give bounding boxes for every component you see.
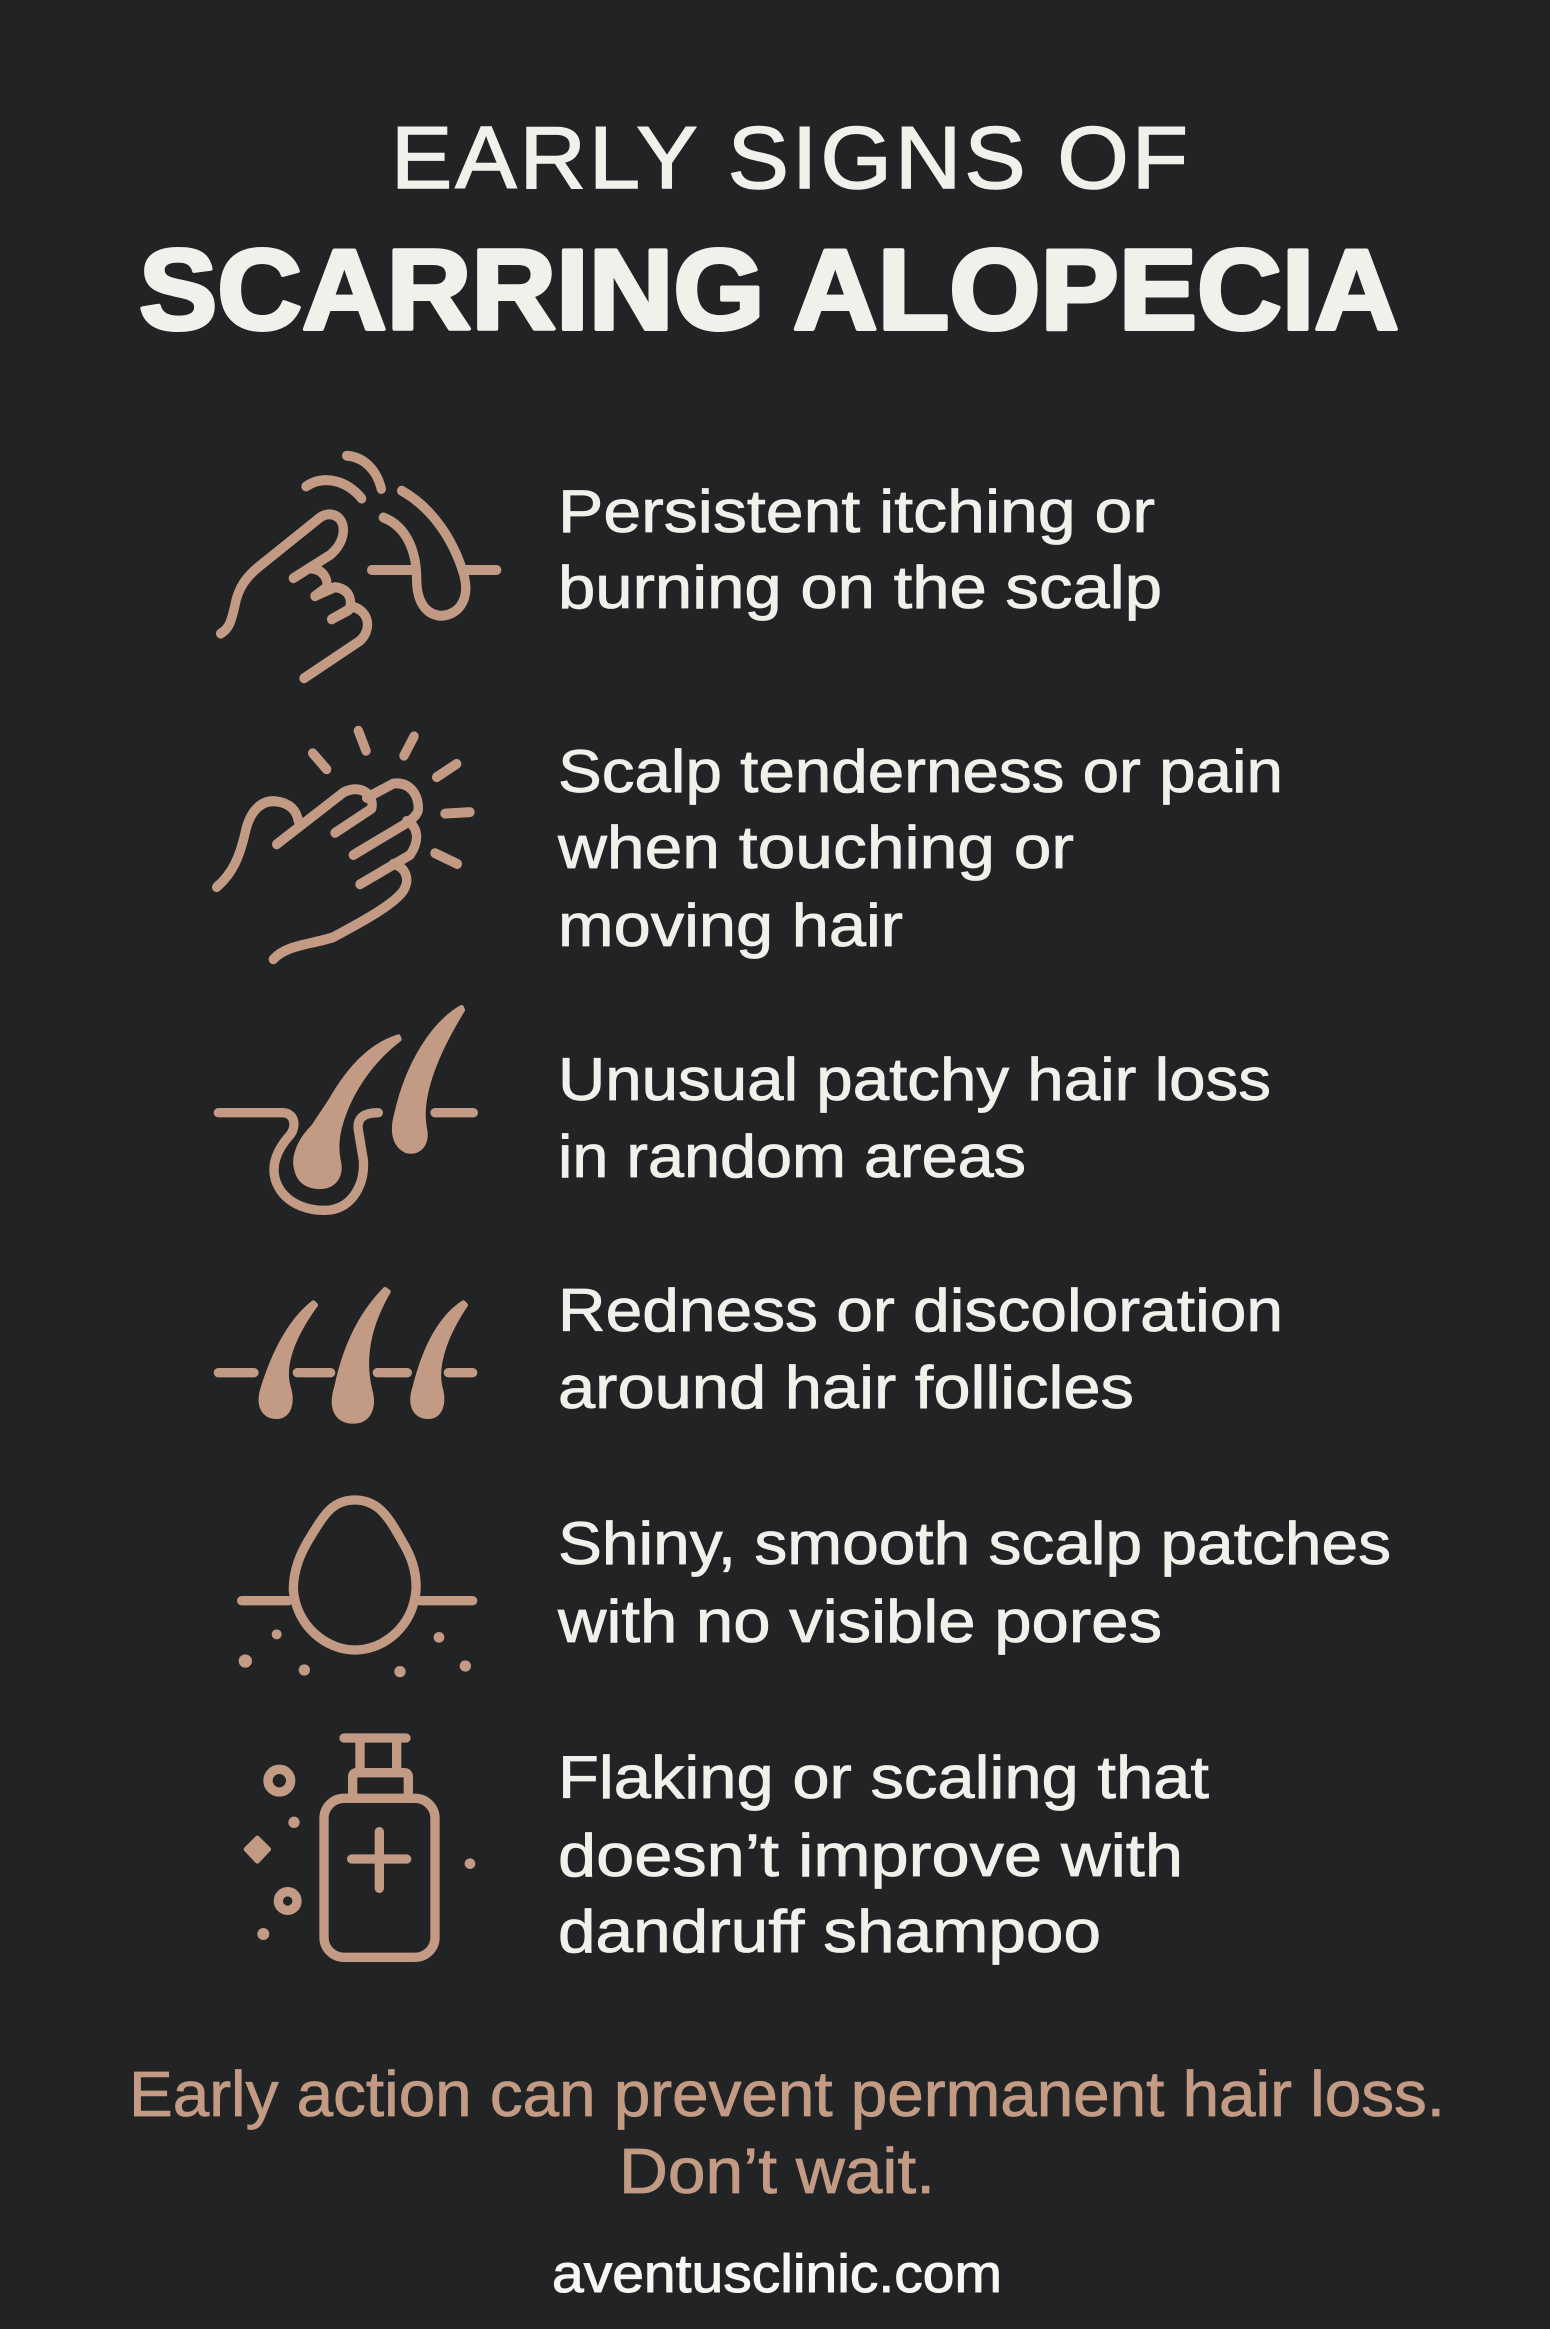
panel: sign 4 redness [218, 1277, 1283, 1421]
text: scalp tenderness [557, 738, 1283, 959]
panel: sign 1 itching [221, 456, 1162, 678]
text: scalp tenderness: when touching or [557, 814, 1074, 881]
text: shiny smooth patches: Shiny, smooth scalp patches [558, 1510, 1391, 1577]
icon: hair follicle in scalp [218, 1007, 473, 1210]
callout: early action: Early action can prevent permanent hair loss. [129, 2058, 1445, 2130]
callout: early action: Don’t wait. [619, 2135, 935, 2207]
icon: finger scratching scalp [221, 456, 497, 678]
text: flaking or scaling: dandruff shampoo [558, 1898, 1101, 1965]
text: persistent itching [558, 478, 1162, 621]
callout: early action [129, 2058, 1445, 2207]
text: redness or discoloration [558, 1277, 1283, 1421]
text: shiny smooth patches: with no visible pores [557, 1588, 1162, 1655]
text: unusual patchy hair loss [558, 1046, 1271, 1190]
text: unusual patchy hair loss: Unusual patchy hair loss [558, 1046, 1271, 1113]
icon: hand touching painful scalp [217, 731, 470, 959]
icon: smooth scalp with dots [239, 1500, 473, 1677]
title line: scarring alopecia: SCARRING ALOPECIA [139, 227, 1399, 354]
text: scalp tenderness: Scalp tenderness or pain [558, 738, 1283, 805]
text: redness or discoloration: Redness or discoloration [558, 1277, 1283, 1344]
text: persistent itching: Persistent itching or [558, 478, 1155, 545]
text: scalp tenderness: moving hair [558, 892, 903, 959]
text: persistent itching: burning on the scalp [558, 554, 1162, 621]
panel: sign 5 shiny patches [239, 1500, 1391, 1677]
text: unusual patchy hair loss: in random areas [558, 1123, 1026, 1190]
icon: shampoo bottle with flakes [246, 1738, 475, 1957]
panel: sign 2 tenderness [217, 731, 1283, 959]
text: flaking or scaling [558, 1744, 1209, 1965]
panel: sign 6 flaking [246, 1738, 1209, 1965]
title [139, 108, 1399, 354]
website url: aventusclinic.com [552, 2244, 1002, 2304]
text: shiny smooth patches [557, 1510, 1391, 1655]
text: flaking or scaling: Flaking or scaling that [558, 1744, 1209, 1811]
text: flaking or scaling: doesn’t improve with [558, 1822, 1183, 1889]
text: redness or discoloration: around hair follicles [558, 1354, 1134, 1421]
icon: three hair follicles [218, 1289, 473, 1421]
panel: sign 3 patchy hair loss [218, 1007, 1271, 1210]
title line: early signs of: EARLY SIGNS OF [391, 108, 1191, 207]
